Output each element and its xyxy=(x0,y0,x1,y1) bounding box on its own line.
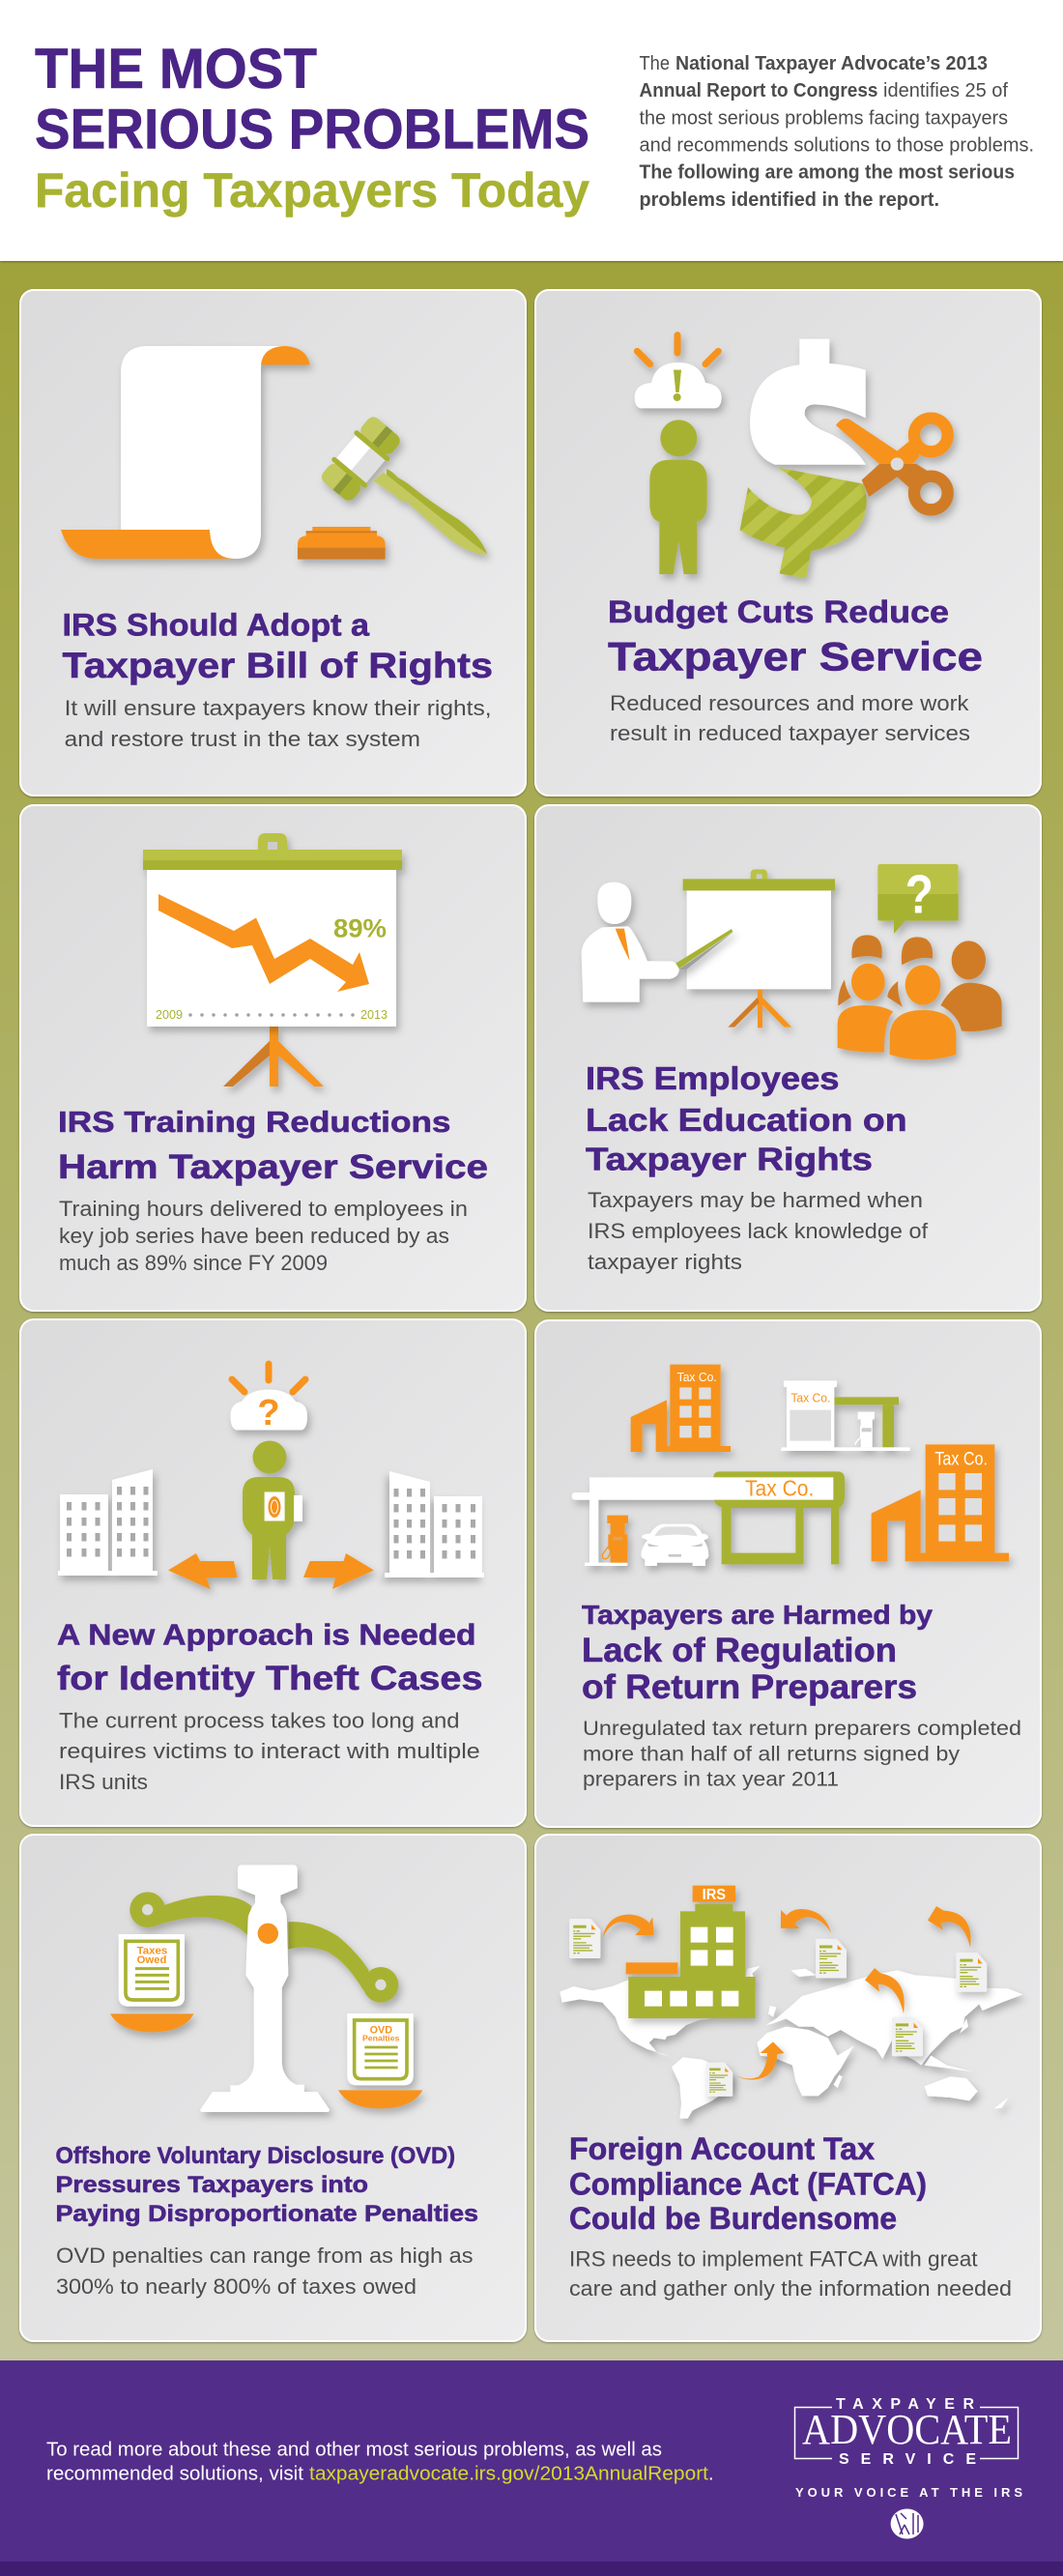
body text: more than half of all returns signed by xyxy=(583,1743,961,1765)
heading xyxy=(582,1600,933,1706)
title: Facing Taxpayers Today xyxy=(35,163,589,217)
body text: much as 89% since FY 2009 xyxy=(59,1251,328,1275)
title: THE MOST xyxy=(35,38,317,101)
icon: speech bubble question xyxy=(877,864,959,934)
heading: Paying Disproportionate Penalties xyxy=(56,2201,478,2227)
right document and pan xyxy=(338,2013,422,2108)
icon: large tax office xyxy=(872,1444,1009,1561)
left document and pan: Taxes xyxy=(137,1946,167,1957)
panel: budget cuts xyxy=(535,290,1041,796)
heading xyxy=(57,1618,483,1697)
declining arrow xyxy=(158,894,369,992)
intro text: National Taxpayer Advocate’s 2013 xyxy=(675,53,988,74)
timeline: 2009 xyxy=(156,1007,183,1022)
heading: Taxpayers are Harmed by xyxy=(582,1600,933,1630)
footer text: recommended solutions, visit xyxy=(46,2464,303,2485)
header xyxy=(0,0,1063,261)
body text xyxy=(56,2243,474,2299)
right document and pan: Penalties xyxy=(362,2034,400,2042)
icon: IRS building xyxy=(626,1886,756,2018)
footer text: To read more about these and other most serious problems, as well as xyxy=(46,2440,662,2461)
body text: Taxpayers may be harmed when xyxy=(588,1188,923,1212)
icon: small gas station: Tax Co. xyxy=(790,1391,830,1405)
icon: question burst and cloud: ? xyxy=(257,1393,280,1433)
icon: alert burst and cloud xyxy=(635,335,722,408)
world map xyxy=(560,1966,1022,2119)
heading: Taxpayer Rights xyxy=(586,1141,873,1177)
icon: documents xyxy=(569,1919,987,2097)
logo: Taxpayer Advocate Service: ADVOCATE xyxy=(802,2406,1012,2453)
scale beam xyxy=(129,1892,398,2003)
logo: Taxpayer Advocate Service xyxy=(794,2396,1022,2500)
screen stand xyxy=(223,1027,324,1086)
body text: IRS needs to implement FATCA with great xyxy=(569,2246,978,2272)
heading: of Return Preparers xyxy=(582,1668,917,1706)
heading: Lack of Regulation xyxy=(582,1632,897,1669)
heading xyxy=(56,2143,478,2227)
heading xyxy=(58,1105,488,1186)
icon: presenter xyxy=(582,883,733,1002)
body text xyxy=(59,1197,468,1275)
panel: OVD xyxy=(20,1835,526,2341)
timeline: 2013 xyxy=(360,1007,388,1022)
body text xyxy=(59,1709,480,1794)
panel: training reductions xyxy=(20,805,526,1311)
intro text: Annual Report to Congress xyxy=(640,80,877,101)
heading: Could be Burdensome xyxy=(569,2201,897,2236)
body text: care and gather only the information needed xyxy=(569,2276,1012,2301)
icon: speech bubble question: ? xyxy=(905,864,934,925)
body text xyxy=(610,691,970,745)
icon: small tax office xyxy=(631,1365,731,1452)
heading: Compliance Act (FATCA) xyxy=(569,2167,927,2202)
title: SERIOUS PROBLEMS xyxy=(35,99,589,160)
intro text xyxy=(640,53,1034,211)
body text: IRS units xyxy=(59,1770,148,1794)
intro text: and recommends solutions to those problems. xyxy=(640,135,1034,157)
intro text: the most serious problems facing taxpayers xyxy=(640,108,1008,130)
icon: presentation screen xyxy=(683,869,835,1028)
pivot xyxy=(258,1924,278,1944)
body text: OVD penalties can range from as high as xyxy=(56,2243,474,2268)
icon: scissors xyxy=(836,419,948,509)
icon: person xyxy=(649,420,707,574)
body text xyxy=(65,696,492,751)
icon: IRS building: IRS xyxy=(703,1887,726,1903)
body text: IRS employees lack knowledge of xyxy=(588,1219,929,1243)
body text: 300% to nearly 800% of taxes owed xyxy=(56,2274,417,2299)
icon: small gas station xyxy=(781,1380,910,1451)
icon: audience xyxy=(838,935,1002,1059)
body text: Unregulated tax return preparers completed xyxy=(583,1718,1021,1740)
heading xyxy=(586,1060,907,1177)
panel: FATCA xyxy=(535,1835,1041,2341)
heading: Pressures Taxpayers into xyxy=(56,2172,368,2198)
intro text: problems identified in the report. xyxy=(640,189,939,211)
intro text: identifies 25 of xyxy=(883,80,1008,101)
icon: scale xyxy=(110,1865,422,2112)
footer text: taxpayeradvocate.irs.gov/2013AnnualReport xyxy=(309,2464,708,2485)
icon: question burst and cloud xyxy=(230,1364,307,1433)
heading: Offshore Voluntary Disclosure (OVD) xyxy=(56,2143,455,2169)
icon: projector screen chart xyxy=(143,833,402,1086)
panel: return preparers xyxy=(535,1320,1041,1827)
heading: Lack Education on xyxy=(586,1102,907,1138)
icon: right building xyxy=(385,1471,484,1577)
right document and pan: OVD xyxy=(370,2024,392,2036)
icon: IRS seal xyxy=(891,2509,924,2538)
timeline xyxy=(156,1007,388,1022)
heading xyxy=(569,2131,927,2236)
panel: taxpayer bill of rights xyxy=(20,290,526,796)
icon: person with id xyxy=(243,1440,302,1579)
arrows: documents to IRS xyxy=(602,1906,971,2080)
body text: taxpayer rights xyxy=(588,1250,742,1274)
heading: IRS Should Adopt a xyxy=(62,607,369,642)
body text: Reduced resources and more work xyxy=(610,691,970,715)
heading: Taxpayer Service xyxy=(608,634,983,679)
intro text: The xyxy=(640,53,670,74)
heading: IRS Employees xyxy=(586,1060,839,1096)
left document and pan: Owed xyxy=(137,1954,166,1966)
body text: and restore trust in the tax system xyxy=(65,727,420,751)
logo: Taxpayer Advocate Service: SERVICE xyxy=(839,2451,976,2468)
body text: requires victims to interact with multiple xyxy=(59,1739,480,1763)
body text: key job series have been reduced by as xyxy=(59,1224,449,1248)
icon: cut dollar sign xyxy=(740,339,867,578)
title xyxy=(35,38,589,217)
footer xyxy=(0,2360,1063,2576)
icon: large tax office: Tax Co. xyxy=(934,1449,988,1469)
intro text: The following are among the most serious xyxy=(640,162,1015,184)
body text: The current process takes too long and xyxy=(59,1709,460,1733)
icon: left building xyxy=(58,1469,158,1576)
heading xyxy=(62,607,493,685)
arrow: left xyxy=(168,1553,238,1589)
arrow: right xyxy=(303,1553,374,1589)
body text xyxy=(583,1718,1021,1791)
left document and pan xyxy=(110,1934,194,2032)
heading xyxy=(608,594,983,679)
heading: IRS Training Reductions xyxy=(58,1105,450,1139)
scale column xyxy=(200,1865,330,2112)
icon: scroll xyxy=(61,346,310,559)
panel: employees lack education xyxy=(535,805,1041,1311)
body text xyxy=(569,2246,1012,2301)
heading: Foreign Account Tax xyxy=(569,2131,875,2166)
heading: Taxpayer Bill of Rights xyxy=(62,646,493,685)
icon: gavel xyxy=(298,413,487,560)
heading: Harm Taxpayer Service xyxy=(58,1148,488,1186)
footer text: . xyxy=(708,2464,714,2485)
screen xyxy=(143,833,402,1027)
body text: It will ensure taxpayers know their rights, xyxy=(65,696,492,720)
icon: large gas station xyxy=(572,1471,845,1566)
body text: Training hours delivered to employees in xyxy=(59,1197,468,1221)
body text: preparers in tax year 2011 xyxy=(583,1769,839,1791)
panel: identity theft xyxy=(20,1319,526,1826)
logo: Taxpayer Advocate Service: YOUR VOICE AT THE IRS xyxy=(795,2485,1022,2500)
logo: Taxpayer Advocate Service: TAXPAYER xyxy=(836,2396,974,2413)
body text xyxy=(588,1188,929,1274)
heading: A New Approach is Needed xyxy=(57,1618,476,1652)
icon: large gas station: Tax Co. xyxy=(745,1475,814,1500)
heading: for Identity Theft Cases xyxy=(57,1660,483,1697)
body text: result in reduced taxpayer services xyxy=(610,721,970,745)
footer text xyxy=(46,2440,714,2485)
89 percent label: 89% xyxy=(333,914,387,943)
heading: Budget Cuts Reduce xyxy=(608,594,949,629)
icon: small tax office: Tax Co. xyxy=(677,1370,717,1384)
